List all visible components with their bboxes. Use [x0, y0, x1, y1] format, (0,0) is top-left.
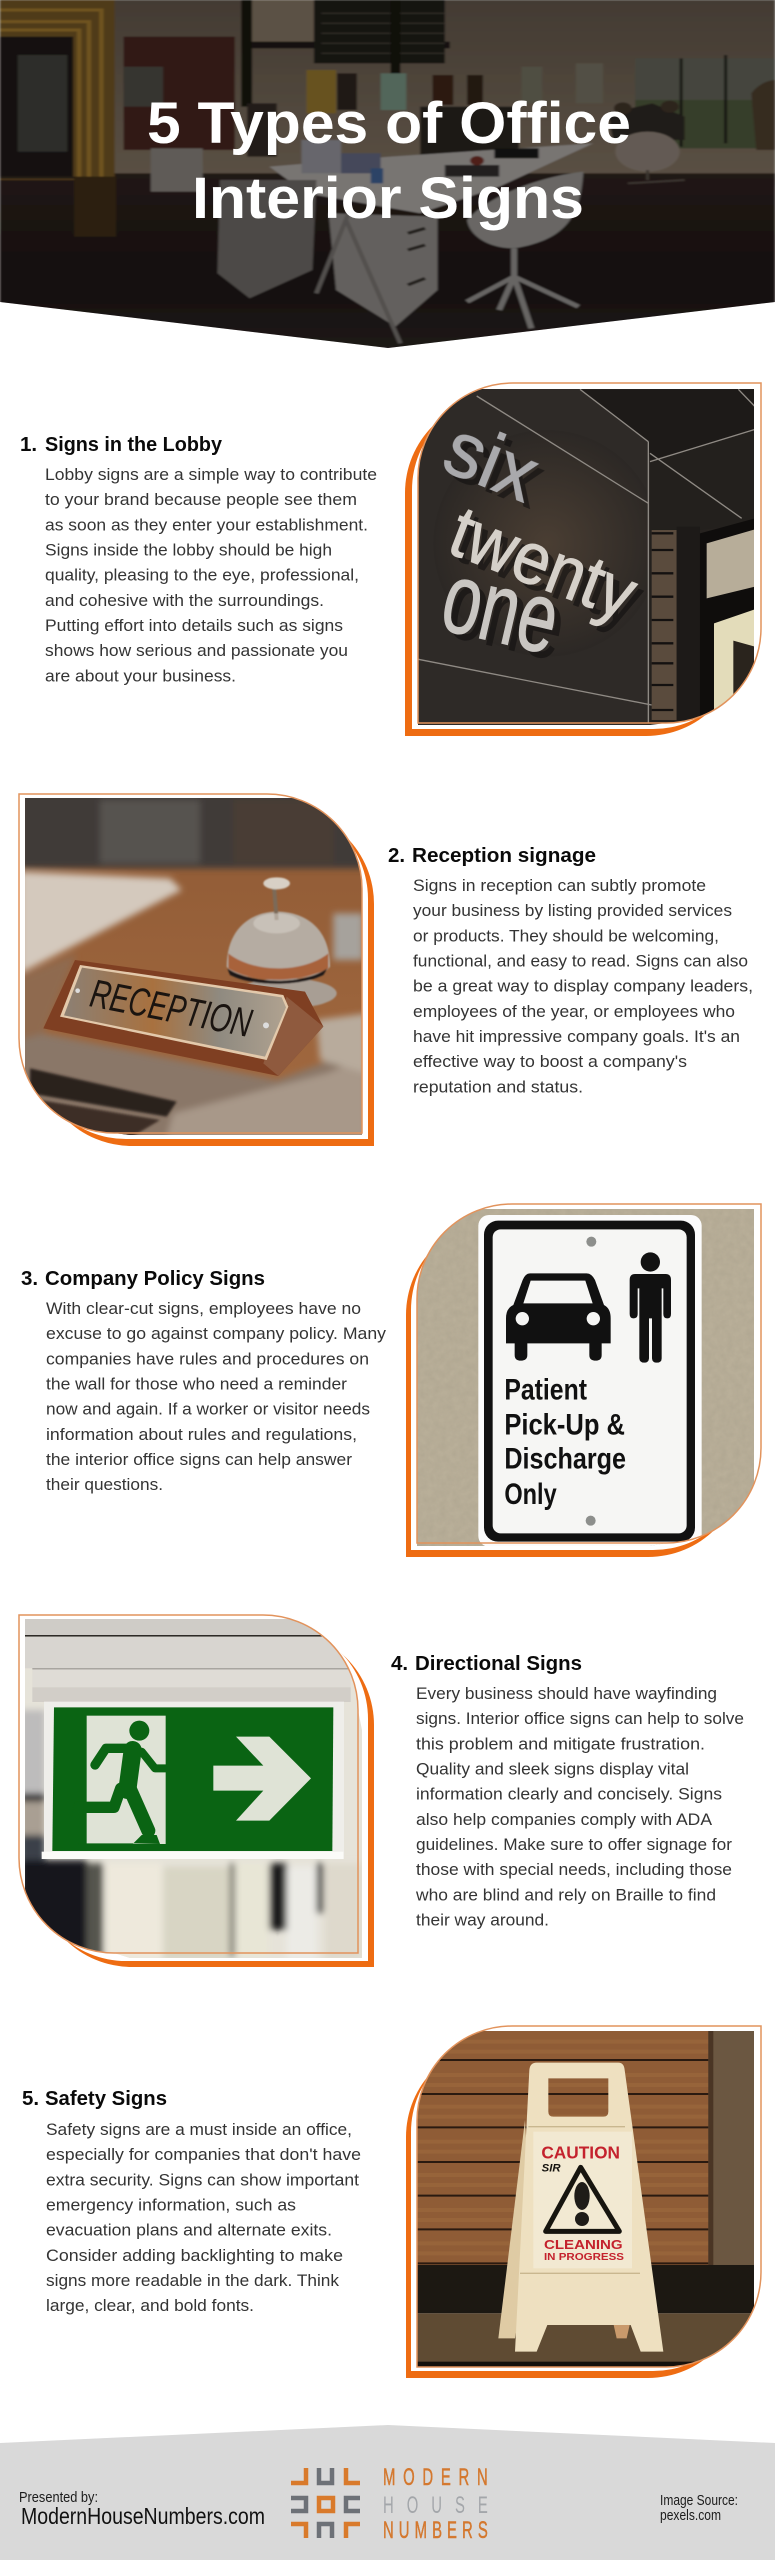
- body text 2: be a great way to display company leaders,: [413, 977, 753, 996]
- photo: caution cleaning sign: SIR: [542, 2163, 561, 2175]
- green panel: [52, 1707, 333, 1851]
- photo: caution cleaning sign: [413, 2027, 760, 2372]
- panel: 3. Company Policy Signs: [21, 1203, 761, 1557]
- sign frame: [44, 1702, 344, 1859]
- image outline 5: [417, 2026, 761, 2367]
- body text 3: the wall for those who need a reminder: [46, 1374, 347, 1394]
- sign lettering: six: [433, 403, 551, 518]
- heading 5: Safety Signs: [45, 2087, 167, 2110]
- body text 4: guidelines. Make sure to offer signage for: [416, 1835, 732, 1854]
- photo: reception desk plaque and bell: [20, 790, 367, 1140]
- body text 1: Lobby signs are a simple way to contribute: [45, 465, 377, 484]
- body text 2: your business by listing provided services: [413, 901, 732, 920]
- sign lettering: [541, 2142, 624, 2263]
- header photo: office interior: [0, 0, 775, 353]
- body text 2: have hit impressive company goals. It's an: [413, 1027, 740, 1046]
- sign lettering: [444, 431, 644, 658]
- heading 1: Signs in the Lobby: [45, 433, 223, 456]
- image frame 1: orange offset shape: [405, 398, 741, 736]
- sign lettering: Only: [504, 1478, 557, 1511]
- sign lettering: Pick-Up &: [504, 1408, 625, 1441]
- panel: 1. Signs in the Lobby: [20, 383, 761, 736]
- image source: pexels.com: [660, 2508, 721, 2524]
- body text 4: those with special needs, including those: [416, 1860, 732, 1879]
- body text 4: Every business should have wayfinding: [416, 1684, 717, 1703]
- photo: six twenty one lobby sign: [413, 383, 760, 730]
- body text 3: the interior office signs can help answer: [46, 1450, 352, 1469]
- presented by: ModernHouseNumbers.com: [21, 2503, 265, 2529]
- body text 3: excuse to go against company policy. Many: [46, 1324, 387, 1343]
- title: Interior Signs: [192, 166, 584, 231]
- sign lettering: [504, 1373, 626, 1511]
- photo: green exit sign: [20, 1613, 367, 1967]
- image frame 3: orange offset shape: [406, 1220, 743, 1557]
- body text 1: shows how serious and passionate you: [45, 641, 348, 660]
- body text 2: functional, and easy to read. Signs can also: [413, 952, 748, 970]
- heading 1: 1.: [20, 433, 37, 456]
- sign lettering: six: [440, 409, 558, 525]
- sign lettering: Discharge: [504, 1443, 626, 1476]
- body text 1: Putting effort into details such as signs: [45, 616, 343, 635]
- image outline 2: [19, 794, 362, 1133]
- sign lettering: twenty: [446, 497, 655, 642]
- sign body: [515, 2063, 663, 2352]
- body text 4: this problem and mitigate frustration.: [416, 1734, 705, 1753]
- body text 5: Consider adding backlighting to make: [46, 2246, 343, 2265]
- logo wordmark: NUMBERS: [383, 2518, 488, 2544]
- body text 2: Signs in reception can subtly promote: [413, 876, 706, 895]
- body text 3: their questions.: [46, 1475, 163, 1494]
- body text 4: [415, 1684, 744, 1930]
- heading 4: Directional Signs: [415, 1652, 582, 1675]
- body text 5: evacuation plans and alternate exits.: [46, 2221, 332, 2240]
- body text 4: who are blind and rely on Braille to find: [415, 1885, 716, 1904]
- body text 1: quality, pleasing to the eye, professional,: [45, 566, 359, 585]
- image outline 3: [417, 1204, 761, 1543]
- sign lettering: Patient: [504, 1373, 587, 1406]
- icon: car: [506, 1273, 611, 1361]
- body text 1: to your brand because people see them: [45, 490, 357, 509]
- logo wordmark: MODERN: [383, 2465, 488, 2491]
- body text 5: signs more readable in the dark. Think: [46, 2271, 340, 2290]
- body text 1: and cohesive with the surroundings.: [45, 591, 324, 610]
- image outline 4: [19, 1615, 358, 1953]
- photo: reception desk plaque and bell: RECEPTION: [87, 972, 255, 1046]
- body text 3: companies have rules and procedures on: [46, 1349, 369, 1368]
- image outline 1: [418, 383, 761, 723]
- heading 2: Reception signage: [412, 844, 596, 867]
- sign lettering: twenty: [439, 490, 648, 635]
- image frame 4: orange offset shape: [37, 1630, 374, 1967]
- title: [147, 91, 631, 231]
- image frame 2: orange offset shape: [37, 809, 374, 1146]
- panel: 5. Safety Signs: [22, 2026, 761, 2378]
- body text 4: their way around.: [416, 1911, 549, 1930]
- panel: 2. Reception signage: [19, 790, 753, 1146]
- icon: person: [641, 1252, 660, 1272]
- body text 2: reputation and status.: [413, 1077, 583, 1096]
- sign lettering: one: [432, 541, 570, 676]
- body text 4: also help companies comply with ADA: [416, 1810, 713, 1829]
- back leg of sign: [498, 2120, 526, 2338]
- sign lettering: CAUTION: [541, 2142, 620, 2162]
- body text 1: Signs inside the lobby should be high: [45, 540, 332, 560]
- body text 2: effective way to boost a company's: [413, 1052, 687, 1071]
- icon: running figure: [78, 1748, 166, 1831]
- body text 3: information about rules and regulations,: [46, 1425, 357, 1444]
- heading 4: 4.: [391, 1652, 408, 1675]
- sign lettering: one: [439, 547, 576, 682]
- body text 1: as soon as they enter your establishment.: [45, 515, 368, 534]
- body text 5: [46, 2120, 361, 2315]
- heading 3: 3.: [21, 1267, 38, 1290]
- body text 1: are about your business.: [45, 666, 236, 685]
- sign lettering: IN PROGRESS: [544, 2252, 624, 2263]
- body text 5: extra security. Signs can show important: [46, 2170, 359, 2189]
- panel: 4. Directional Signs: [19, 1613, 744, 1967]
- title: 5 Types of Office: [147, 91, 631, 156]
- footer: [0, 2425, 775, 2560]
- heading 3: Company Policy Signs: [45, 1267, 265, 1290]
- presented by: Presented by:: [19, 2489, 98, 2506]
- sign lettering: CLEANING: [544, 2238, 623, 2252]
- header banner: [0, 0, 775, 353]
- photo: patient pick-up sign: [413, 1203, 760, 1550]
- body text 5: large, clear, and bold fonts.: [46, 2296, 254, 2315]
- logo: Modern House Numbers: [291, 2465, 488, 2544]
- plaque: [43, 960, 323, 1076]
- body text 4: information clearly and concisely. Signs: [416, 1785, 722, 1804]
- footer background: [0, 2425, 775, 2560]
- bell: [227, 877, 337, 1008]
- body text 3: now and again. If a worker or visitor needs: [46, 1400, 370, 1419]
- image frame 5: orange offset shape: [406, 2042, 743, 2378]
- logo wordmark: [383, 2465, 488, 2544]
- presented by: [19, 2489, 265, 2529]
- body text 4: Quality and sleek signs display vital: [416, 1760, 689, 1778]
- heading 2: 2.: [388, 844, 405, 867]
- body text 1: [45, 465, 377, 685]
- icon: arrow right: [213, 1737, 311, 1821]
- body text 5: Safety signs are a must inside an office,: [46, 2120, 352, 2139]
- body text 2: employees of the year, or employees who: [413, 1002, 735, 1021]
- logo mark: [291, 2468, 360, 2538]
- body text 2: [413, 876, 753, 1096]
- body text 3: With clear-cut signs, employees have no: [46, 1299, 361, 1318]
- body text 2: or products. They should be welcoming,: [413, 926, 719, 945]
- body text 4: signs. Interior office signs can help to solve: [416, 1709, 744, 1728]
- image source: Image Source:: [660, 2493, 738, 2509]
- heading 5: 5.: [22, 2087, 39, 2110]
- body text 5: emergency information, such as: [46, 2196, 296, 2214]
- image source: [660, 2493, 738, 2524]
- body text 5: especially for companies that don't have: [46, 2145, 361, 2164]
- logo wordmark: HOUSE: [383, 2493, 488, 2519]
- body text 3: [46, 1299, 387, 1494]
